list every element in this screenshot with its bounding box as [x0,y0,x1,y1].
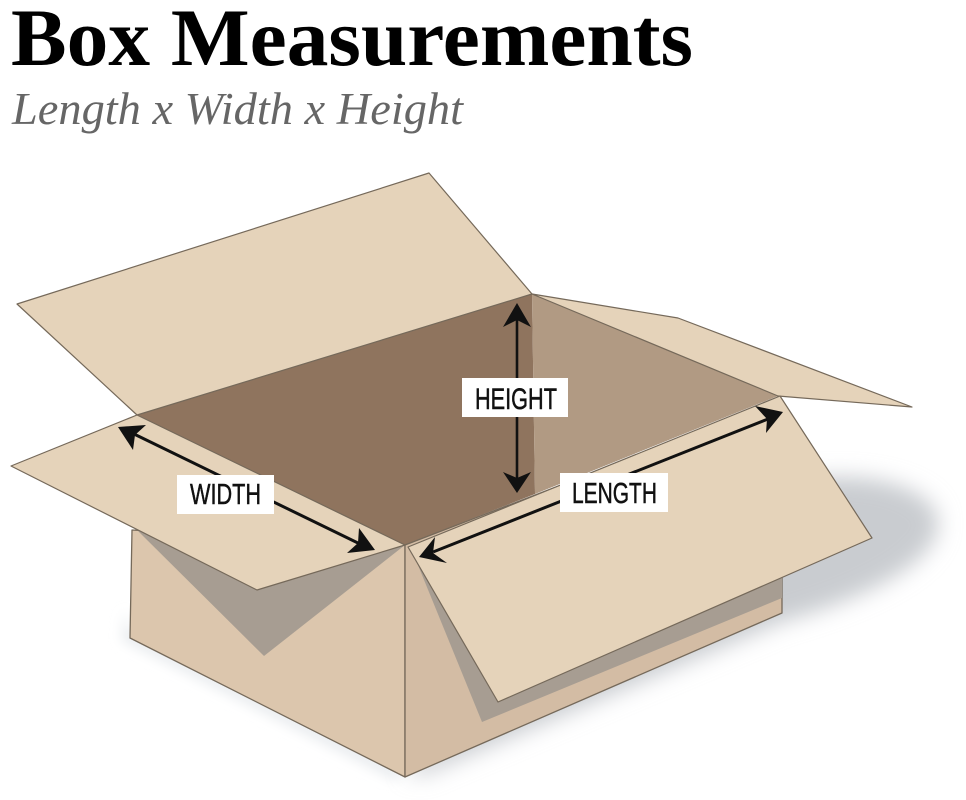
back right flap [532,294,912,407]
back left flap [17,173,532,415]
label: width [177,475,274,514]
label: height [462,378,568,417]
label: height: HEIGHT [475,383,557,416]
ground shadow left [122,610,405,780]
right outer wall [405,400,782,777]
front right flap [408,396,872,702]
label: length: LENGTH [572,478,657,510]
ground shadow right [405,477,938,776]
subtitle: Length x Width x Height [11,84,465,134]
left outer wall [130,530,405,777]
box interior right wall [532,294,778,494]
arrow: height [503,303,531,493]
arrow: width [118,425,375,553]
label: length [560,473,668,512]
box interior back wall [137,294,535,545]
shadow under right flap [411,500,782,722]
arrow: length [419,406,783,563]
front left flap [11,415,405,590]
box illustration [11,173,938,780]
shadow under left flap [138,531,405,656]
label: width: WIDTH [190,479,261,511]
